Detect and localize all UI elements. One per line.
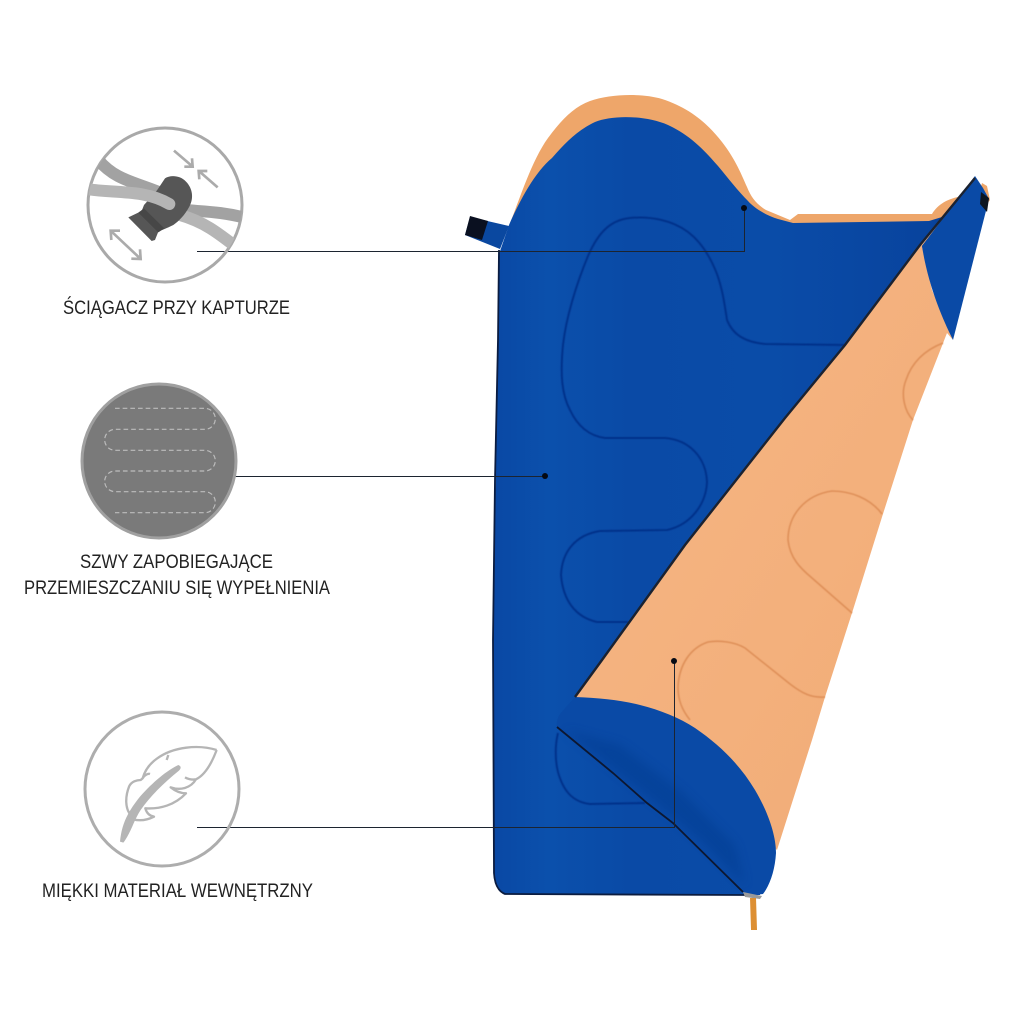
quilting stitches on orange side [678, 343, 943, 720]
icon: quilting seams [82, 384, 236, 538]
sleeping bag [465, 95, 990, 930]
caption: seams [24, 552, 330, 599]
body left edge [493, 250, 745, 895]
blue bottom flap [557, 697, 776, 895]
caption: seams: SZWY ZAPOBIEGAJĄCE [80, 552, 273, 573]
leader line: seams [216, 473, 548, 479]
velcro strap [465, 216, 509, 249]
blue outer body [493, 117, 955, 895]
zipper pull [743, 892, 762, 930]
quilting stitches on blue side [556, 218, 847, 804]
caption: hood drawcord: ŚCIĄGACZ PRZY KAPTURZE [63, 297, 290, 319]
leader line: soft material [197, 658, 677, 828]
icon: drawcord cinch [83, 128, 247, 282]
diagonal zipper edge [575, 178, 975, 697]
caption: seams: PRZEMIESZCZANIU SIĘ WYPEŁNIENIA [24, 578, 330, 599]
orange inner lining flap [575, 178, 975, 850]
caption: soft material: MIĘKKI MATERIAŁ WEWNĘTRZNY [42, 881, 313, 902]
leader line: hood drawcord [197, 205, 747, 252]
hood orange lining [509, 95, 990, 240]
icon: feather [85, 712, 239, 866]
bottom zipper edge [557, 727, 743, 892]
hood end trim [980, 192, 989, 212]
flap shadow [565, 730, 745, 885]
blue top corner flap [922, 176, 989, 340]
